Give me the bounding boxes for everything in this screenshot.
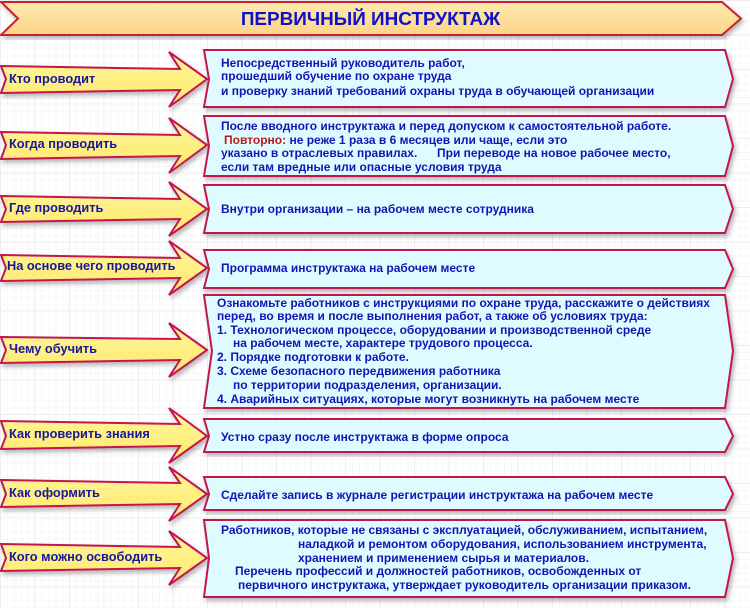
panel: На основе чего проводить — [204, 250, 733, 288]
arrow: Кого можно освободить: Кого можно освободить — [9, 549, 162, 564]
panel: Как оформить: Сделайте запись в журнале регистрации инструктажа на рабочем месте — [221, 488, 653, 502]
panel: Кого можно освободить: хранением и применением сырья и материалов. — [298, 551, 589, 565]
panel: Чему обучить: 2. Порядке подготовки к работе. — [217, 350, 409, 364]
title — [1, 2, 741, 35]
row: Как проверить знания — [1, 408, 733, 463]
arrow: Чему обучить — [1, 323, 207, 377]
row: Чему обучить — [1, 295, 733, 408]
panel: Как проверить знания — [204, 419, 733, 452]
arrow: Чему обучить: Чему обучить — [9, 341, 97, 356]
arrow: Когда проводить — [1, 118, 207, 173]
arrow: На основе чего проводить — [1, 241, 207, 295]
arrow: Когда проводить: Когда проводить — [9, 136, 117, 151]
panel: Чему обучить: 4. Аварийных ситуациях, которые могут возникнуть на рабочем месте — [217, 392, 640, 406]
panel: Когда проводить: если там вредные или опасные условия труда — [221, 160, 502, 174]
arrow: Кто проводит: Кто проводит — [9, 71, 95, 86]
panel: Кто проводит: и проверку знаний требований охраны труда в обучающей организации — [221, 84, 654, 98]
row: Как оформить — [1, 467, 733, 521]
panel: Кого можно освободить: Перечень профессий и должностей работников, освобожденных от — [235, 564, 641, 578]
row: Где проводить — [1, 182, 733, 236]
row: Кого можно освободить — [1, 520, 733, 597]
arrow: Как проверить знания: Как проверить знания — [9, 426, 150, 441]
arrow: Как оформить: Как оформить — [9, 485, 100, 500]
panel: Когда проводить: После вводного инструктажа и перед допуском к самостоятельной работе. — [221, 119, 671, 133]
panel: Как оформить — [204, 477, 733, 510]
panel: Чему обучить: по территории подразделения, организации. — [233, 378, 502, 392]
panel: На основе чего проводить: Программа инструктажа на рабочем месте — [221, 261, 475, 275]
panel: Чему обучить: на рабочем месте, характере трудового процесса. — [233, 336, 533, 350]
panel: Где проводить: Внутри организации – на рабочем месте сотрудника — [221, 202, 534, 216]
panel: Кого можно освободить — [204, 520, 733, 597]
row: Когда проводить — [1, 116, 733, 176]
panel: Чему обучить — [204, 295, 733, 408]
panel: Когда проводить: При переводе на новое рабочее место, — [437, 146, 671, 160]
arrow: Где проводить — [1, 182, 207, 236]
panel: Когда проводить — [204, 116, 733, 176]
arrow: Как проверить знания — [1, 408, 207, 463]
panel: Чему обучить: 1. Технологическом процессе, оборудовании и производственной среде — [217, 323, 651, 337]
panel: Где проводить — [204, 185, 733, 233]
row: Кто проводит — [1, 50, 733, 107]
panel: Кого можно освободить: Работников, которые не связаны с эксплуатацией, обслуживанием, испытанием, — [221, 523, 707, 537]
panel: Кто проводит — [204, 50, 733, 107]
panel: Чему обучить: Ознакомьте работников с инструкциями по охране труда, расскажите о действиях — [217, 296, 710, 310]
row: На основе чего проводить — [1, 241, 733, 295]
panel: Кто проводит: Непосредственный руководитель работ, — [221, 56, 465, 70]
panel: Кто проводит: прошедший обучение по охране труда — [221, 69, 452, 83]
panel: Чему обучить: 3. Схеме безопасного передвижения работника — [217, 364, 501, 378]
arrow: Где проводить: Где проводить — [9, 200, 104, 215]
arrow: На основе чего проводить: На основе чего проводить — [7, 258, 176, 273]
panel: Когда проводить: указано в отраслевых правилах. — [221, 146, 417, 160]
arrow: Как оформить — [1, 467, 207, 521]
panel: Чему обучить: перед, во время и после выполнения работ, а также об условиях труда: — [217, 309, 648, 323]
title: ПЕРВИЧНЫЙ ИНСТРУКТАЖ — [241, 8, 501, 30]
arrow: Кто проводит — [1, 52, 207, 107]
panel: Кого можно освободить: первичного инструктажа, утверждает руководитель организации приказом. — [238, 578, 691, 592]
arrow: Кого можно освободить — [1, 531, 207, 585]
panel: Как проверить знания: Устно сразу после инструктажа в форме опроса — [221, 430, 509, 444]
panel: Кого можно освободить: наладкой и ремонтом оборудования, использованием инструмента, — [298, 537, 707, 551]
panel: Когда проводить: Повторно: не реже 1 раза в 6 месяцев или чаще, если это — [224, 133, 567, 147]
